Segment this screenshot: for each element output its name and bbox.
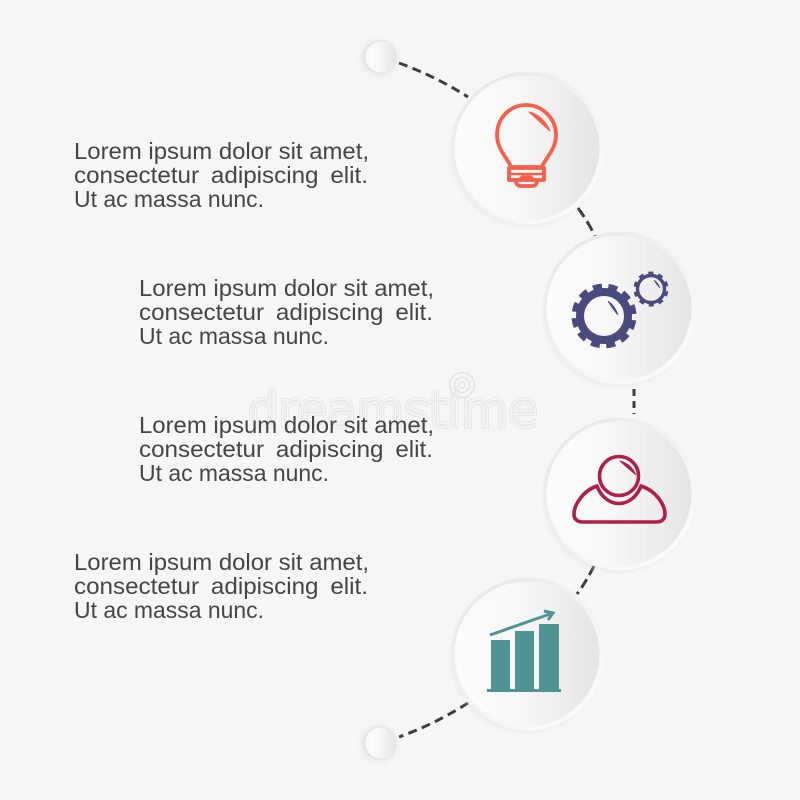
icon: person: [574, 456, 665, 522]
watermark: dreamstime: [248, 381, 538, 439]
icon: large gear: [571, 283, 637, 349]
icon: bar chart: [487, 611, 561, 692]
text block 1: Lorem ipsum dolor sit amet,: [74, 138, 369, 164]
text block 1: Ut ac massa nunc.: [74, 186, 264, 212]
text block 2: Lorem ipsum dolor sit amet,: [139, 275, 434, 301]
start node: [361, 40, 397, 76]
text block 4: Lorem ipsum dolor sit amet,: [74, 549, 369, 575]
dashed connector: bulb to gears: [578, 208, 595, 236]
text block 3: consectetur adipiscing elit.: [139, 436, 433, 462]
panel: lightbulb disc: [452, 72, 604, 226]
text block 3: [139, 412, 434, 486]
icon: lightbulb: [497, 105, 556, 186]
text block 2: Ut ac massa nunc.: [139, 323, 329, 349]
text block 3: Ut ac massa nunc.: [139, 460, 329, 486]
text block 4: consectetur adipiscing elit.: [74, 573, 368, 599]
text block 1: [74, 138, 369, 212]
panel: gears disc: [544, 232, 696, 386]
dashed connector: bottom: [399, 703, 468, 737]
text block 3: Lorem ipsum dolor sit amet,: [139, 412, 434, 438]
panel: chart disc: [452, 578, 604, 732]
dashed connector: gears to person: [632, 389, 636, 414]
dashed connector: person to chart: [577, 566, 594, 594]
text block 2: [139, 275, 434, 349]
dashed connector: top: [399, 63, 468, 97]
text block 4: [74, 549, 369, 623]
watermark: dreamstime: [248, 381, 538, 439]
end node: [361, 726, 397, 762]
icon: small gear: [633, 271, 669, 307]
panel: person disc: [544, 418, 696, 572]
text block 4: Ut ac massa nunc.: [74, 597, 264, 623]
text block 2: consectetur adipiscing elit.: [139, 299, 433, 325]
text block 1: consectetur adipiscing elit.: [74, 162, 368, 188]
